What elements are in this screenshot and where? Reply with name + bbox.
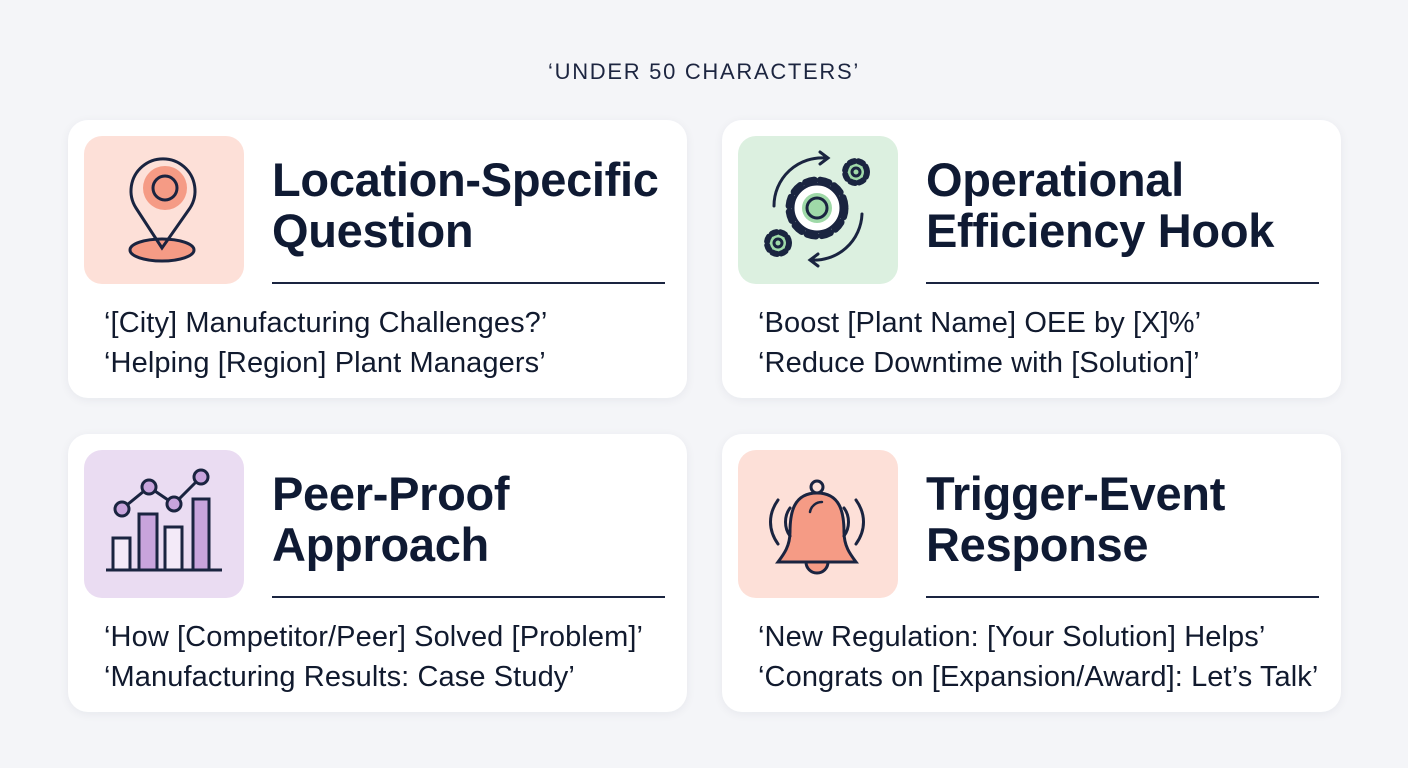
text block: ‘Reduce Downtime with [Solution]’ [758, 347, 1200, 379]
heading [926, 153, 1274, 257]
heading: Question [272, 204, 473, 257]
heading: Efficiency Hook [926, 204, 1274, 257]
heading: Response [926, 518, 1148, 571]
heading: Approach [272, 518, 489, 571]
text block [104, 621, 643, 693]
text block: ‘Manufacturing Results: Case Study’ [104, 661, 575, 693]
icon: gears [738, 136, 898, 284]
icon: bell [738, 450, 898, 598]
text block: ‘New Regulation: [Your Solution] Helps’ [758, 621, 1265, 653]
panel: peer-proof [68, 434, 687, 712]
title: ‘UNDER 50 CHARACTERS’ [548, 59, 860, 84]
heading: Location-Specific [272, 153, 659, 206]
heading: Peer-Proof [272, 467, 509, 520]
text block: ‘Helping [Region] Plant Managers’ [104, 347, 546, 379]
text block [758, 307, 1201, 379]
text block [758, 621, 1318, 693]
panel: location-specific [68, 120, 687, 398]
text block [104, 307, 547, 379]
panel: operational efficiency [722, 120, 1341, 398]
heading: Operational [926, 153, 1184, 206]
text block: ‘How [Competitor/Peer] Solved [Problem]’ [104, 621, 643, 653]
heading [926, 467, 1225, 571]
text block: ‘Boost [Plant Name] OEE by [X]%’ [758, 307, 1201, 339]
text block: ‘[City] Manufacturing Challenges?’ [104, 307, 547, 339]
icon: bar chart [84, 450, 244, 598]
heading [272, 153, 659, 257]
text block: ‘Congrats on [Expansion/Award]: Let’s Talk’ [758, 661, 1318, 693]
heading: Trigger-Event [926, 467, 1225, 520]
panel: trigger-event [722, 434, 1341, 712]
icon: map pin [84, 136, 244, 284]
heading [272, 467, 510, 571]
